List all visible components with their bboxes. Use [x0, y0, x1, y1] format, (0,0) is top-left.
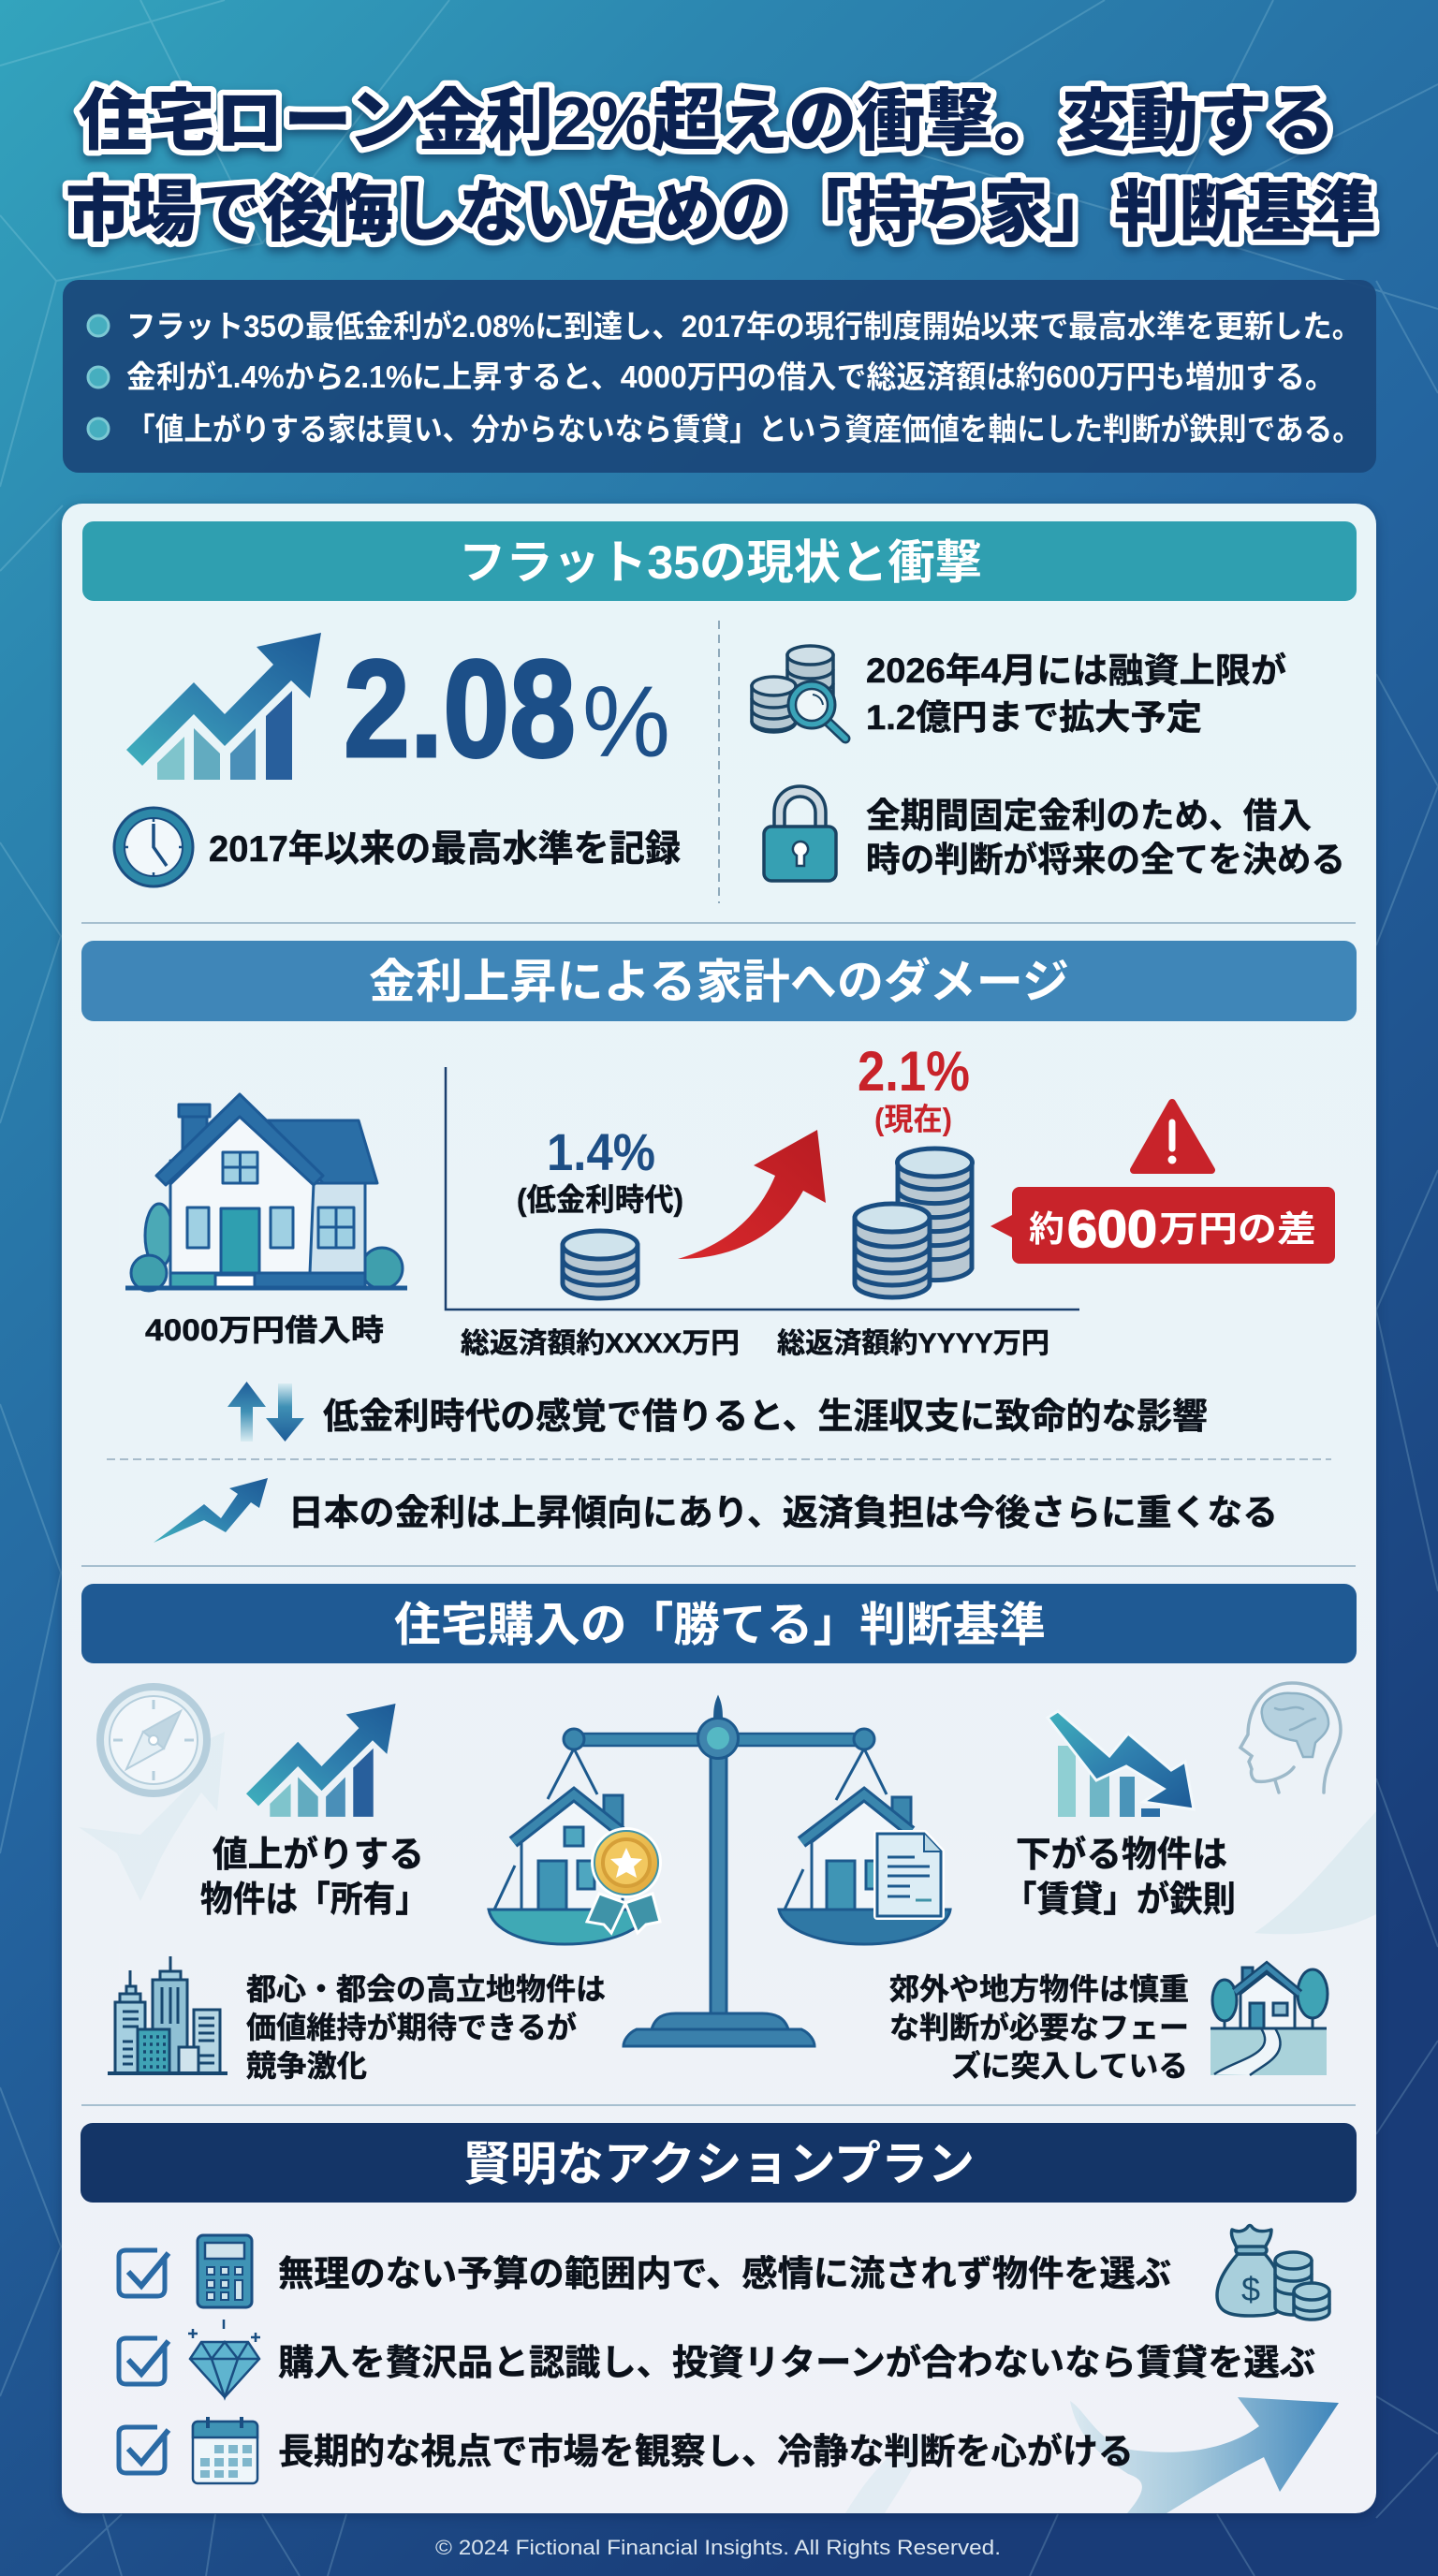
summary line 3: 「値上がりする家は買い、分からないなら賃貸」という資産価値を軸にした判断が鉄則である。 — [126, 412, 1361, 446]
text: loan cap — [866, 651, 1286, 737]
medal — [587, 1827, 662, 1933]
icon: clock — [114, 808, 193, 886]
text: city properties: 競争激化 — [246, 2049, 367, 2083]
panel: summary — [63, 280, 1376, 473]
text: fatal impact: 低金利時代の感覚で借りると、生涯収支に致命的な影響 — [323, 1398, 1208, 1437]
icon: calendar — [193, 2417, 257, 2483]
icon: suburban house with road — [1211, 1967, 1328, 2075]
icon: coins with magnifier — [752, 646, 845, 739]
icon: house — [125, 1094, 407, 1291]
text: rent falling: 下がる物件は — [1016, 1836, 1227, 1875]
text: suburban properties: な判断が必要なフェー — [889, 2011, 1189, 2044]
summary line 1: フラット35の最低金利が2.08%に到達し、2017年の現行制度開始以来で最高水準を更新した。 — [126, 309, 1361, 344]
pillar — [711, 1697, 726, 2015]
text: fixed rate: 時の判断が将来の全てを決める — [866, 841, 1345, 879]
label: now: (現在) — [874, 1102, 952, 1136]
icon: diamond — [188, 2320, 260, 2397]
text: buy rising: 値上がりする — [213, 1836, 424, 1875]
callout: 約600万円の差: 万円の差 — [1159, 1210, 1316, 1250]
label: total XXXX: 総返済額約XXXX万円 — [461, 1328, 740, 1359]
icon: checkbox 3 — [119, 2427, 169, 2473]
icon: summary bullet 3 — [88, 418, 109, 439]
text: loan cap: 2026年4月には融資上限が — [866, 651, 1286, 690]
icon: calculator — [198, 2235, 252, 2307]
action row 1 — [119, 2235, 1171, 2307]
heading 1: フラット35の現状と衝撃 — [459, 536, 982, 589]
section: 賢明なアクションプラン — [81, 2123, 1357, 2513]
summary line 2: 金利が1.4%から2.1%に上昇すると、4000万円の借入で総返済額は約600万円も増加する。 — [126, 359, 1335, 394]
icon: small coin stack — [563, 1231, 638, 1298]
heading 3: 住宅購入の「勝てる」判断基準 — [394, 1599, 1046, 1651]
callout: 約600万円の差: 約 — [1029, 1210, 1064, 1250]
heading 1 — [82, 521, 1357, 601]
icon: checkbox 2 — [119, 2338, 169, 2384]
text: city properties: 価値維持が期待できるが — [246, 2011, 577, 2044]
callout: 約600万円の差 — [990, 1187, 1335, 1264]
icon: money bag and coins — [1217, 2226, 1329, 2320]
text: loan cap: 1.2億円まで拡大予定 — [866, 698, 1202, 737]
icon: checkbox 1 — [119, 2250, 169, 2296]
title: 住宅ローン金利2%超えの衝撃。変動する — [79, 84, 1335, 159]
scale strings — [548, 1749, 887, 1800]
text: rent falling: 「賃貸」が鉄則 — [1004, 1881, 1236, 1920]
text: rent falling — [1004, 1836, 1236, 1920]
base — [624, 2013, 814, 2046]
action row 3 — [119, 2417, 1134, 2483]
text: city properties: 都心・都会の高立地物件は — [246, 1972, 606, 2006]
heading 2 — [81, 941, 1357, 1021]
icon: summary bullet 2 — [88, 367, 109, 388]
section: 金利上昇による家計へのダメージ — [81, 941, 1357, 1543]
icon: rising chart — [126, 633, 321, 780]
text: fixed rate: 全期間固定金利のため、借入 — [866, 797, 1312, 835]
text: city properties — [246, 1972, 606, 2083]
document — [877, 1834, 941, 1916]
icon: padlock — [764, 786, 836, 881]
heading 2: 金利上昇による家計へのダメージ — [369, 956, 1069, 1008]
text: buy rising: 物件は「所有」 — [200, 1881, 428, 1920]
text: rising rate trend: 日本の金利は上昇傾向にあり、返済負担は今後さらに重くなる — [288, 1494, 1278, 1533]
icon: rising chart small — [246, 1704, 396, 1817]
icon: summary bullet 1 — [88, 315, 109, 336]
title: 市場で後悔しないための「持ち家」判断基準 — [66, 176, 1376, 250]
left pan with house — [489, 1794, 648, 1944]
text: suburban properties: ズに突入している — [951, 2049, 1188, 2083]
icon: money bag and coins: $ — [1241, 2270, 1260, 2308]
text: action 2: 購入を贅沢品と認識し、投資リターンが合わないなら賃貸を選ぶ — [278, 2344, 1315, 2383]
label: 2.1%: 2.1% — [858, 1040, 970, 1103]
arrow: large pale growth arrow — [845, 2397, 1339, 2513]
panel: main card — [62, 504, 1376, 2513]
icon: balance scale — [489, 1697, 950, 2046]
icon: compass — [100, 1687, 207, 1793]
icon: large coin stack — [855, 1149, 972, 1297]
watermark: pale arrow left — [79, 1732, 225, 1901]
title — [66, 84, 1376, 250]
icon: warning — [1134, 1103, 1211, 1170]
text: record high: 2017年以来の最高水準を記録 — [209, 829, 681, 870]
right pan with house — [779, 1794, 950, 1944]
callout: 約600万円の差: 600 — [1067, 1199, 1157, 1258]
chart: repayment comparison — [446, 1040, 1079, 1359]
heading 4 — [81, 2123, 1357, 2203]
section: 住宅購入の「勝てる」判断基準 — [81, 1584, 1357, 2083]
beam — [564, 1719, 874, 1758]
icon: city buildings — [108, 1956, 227, 2073]
footer: © 2024 Fictional Financial Insights. All Rights Reserved. — [435, 2536, 1001, 2559]
heading 3 — [81, 1584, 1357, 1663]
icon: falling chart — [1048, 1711, 1194, 1817]
icon: up and down arrows — [227, 1382, 304, 1442]
text: buy rising — [200, 1836, 428, 1920]
text: action 3: 長期的な視点で市場を観察し、冷静な判断を心がける — [278, 2433, 1134, 2472]
text: suburban properties: 郊外や地方物件は慎重 — [889, 1972, 1189, 2006]
text: fixed rate — [866, 797, 1345, 879]
section: フラット35の現状と衝撃 — [82, 521, 1357, 886]
watermark: pale streak right — [1255, 1811, 1376, 1934]
icon: trend arrow — [154, 1478, 268, 1543]
icon: head with brain — [1240, 1683, 1341, 1793]
action row 2 — [119, 2320, 1315, 2397]
label: total YYYY: 総返済額約YYYY万円 — [777, 1328, 1049, 1359]
big number 2.08%: 2.08 — [344, 632, 576, 786]
arrow: rate rise — [678, 1130, 826, 1259]
label: 1.4%: 1.4% — [547, 1122, 655, 1181]
text: suburban properties — [889, 1972, 1189, 2083]
text: action 1: 無理のない予算の範囲内で、感情に流されず物件を選ぶ — [278, 2255, 1171, 2294]
label: 4000万円借入時: 4000万円借入時 — [145, 1313, 384, 1347]
heading 4: 賢明なアクションプラン — [463, 2138, 975, 2190]
label: low rate era: (低金利時代) — [517, 1182, 683, 1217]
big number 2.08%: % — [582, 665, 670, 778]
